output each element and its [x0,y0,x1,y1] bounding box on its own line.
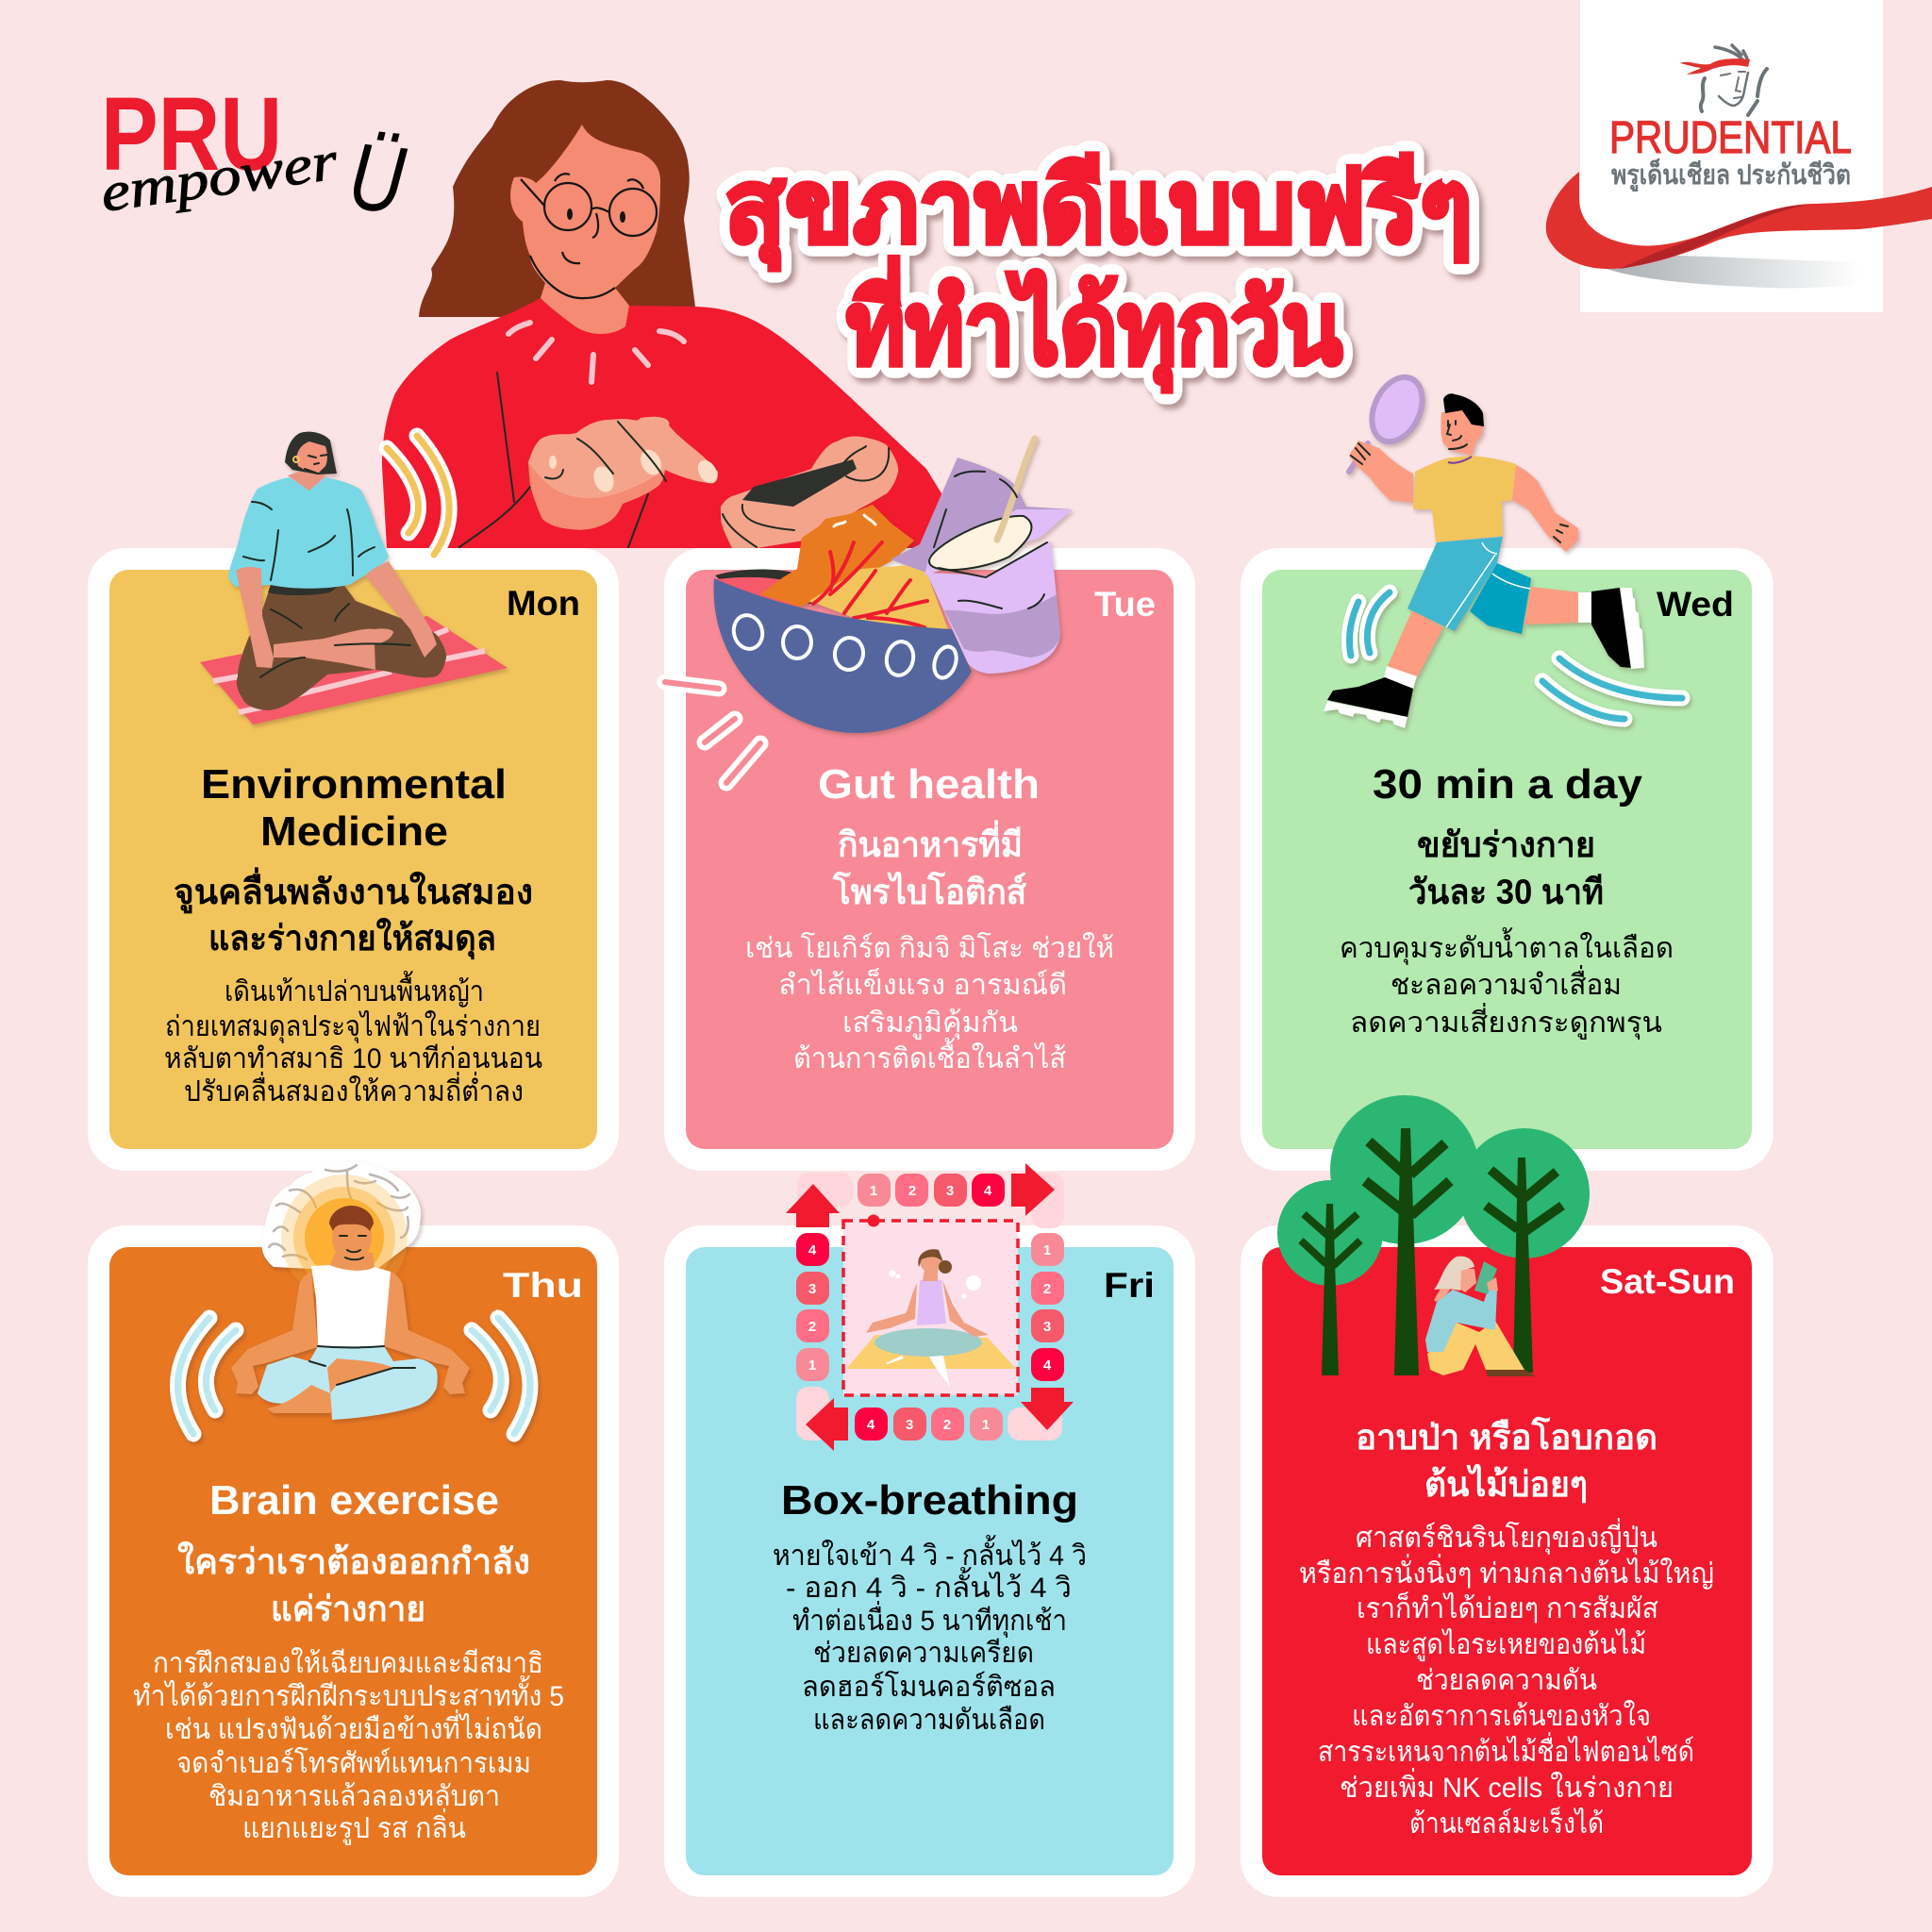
glasses [521,174,657,298]
body text: เสริมภูมิคุ้มกัน [842,1008,1018,1041]
number tiles: 2 [808,1319,816,1335]
sweater [382,298,943,548]
body text: ช่วยลดความเครียด [813,1638,1034,1669]
body text: ช่วยลดความดัน [1416,1665,1597,1696]
collar marks [508,323,684,382]
diagram: box breathing [786,1163,1074,1451]
body text: ถ่ายเทสมดุลประจุไฟฟ้าในร่างกาย [165,1009,541,1044]
subheading: อาบป่า หรือโอบกอด [1356,1416,1657,1457]
title [724,149,1473,392]
body text: ลดฮอร์โมนคอร์ติซอล [802,1670,1056,1703]
body text: ลำไส้แข็งแรง อารมณ์ดี [778,967,1067,1001]
panel: Thursday Brain exercise [88,1161,619,1897]
subheading: และร่างกายให้สมดุล [208,917,496,960]
body text: หลับตาทำสมาธิ 10 นาทีก่อนนอน [164,1043,542,1074]
number tiles: 4 [1043,1357,1052,1374]
title red fill [724,149,1473,392]
number tiles: 1 [870,1183,877,1199]
card frame [1241,1225,1774,1897]
white logo panel [1580,0,1883,312]
number tiles: 3 [808,1281,816,1297]
finger nails [549,446,721,495]
card frame [88,1225,619,1897]
panel: Monday Environmental Medicine [88,432,619,1171]
subheading: ใครว่าเราต้องออกกำลัง [177,1541,530,1581]
day label: Thu [503,1266,583,1305]
body text: หรือการนั่งนิ่งๆ ท่ามกลางต้นไม้ใหญ่ [1299,1554,1714,1590]
number tiles: 2 [943,1417,951,1433]
day label: Sat-Sun [1600,1262,1735,1301]
motion pills [665,682,760,783]
icon: running man with racket [1324,369,1682,728]
icon: brain halo and meditating man [178,1161,530,1434]
heading: Gut health [818,761,1040,808]
thai wordmark: พรูเด็นเชียล ประกันชีวิต [1611,158,1851,192]
face and neck [510,125,660,334]
heading: Box-breathing [781,1477,1078,1524]
subheading [1356,1416,1657,1504]
illustration: woman with glasses eating [382,80,943,548]
number tiles: 1 [808,1357,816,1374]
corner tiles [796,1173,1064,1441]
panel: Friday Box-breathing [664,1163,1195,1897]
body text [164,971,542,1108]
card fill [686,1247,1174,1875]
arcs: yellow sound marks [387,436,449,555]
ribbon fold [1619,205,1810,269]
body text [1340,927,1674,1041]
arrows [786,1163,1074,1451]
number tiles: 3 [1043,1319,1051,1335]
body text: เราก็ทำได้บ่อยๆ การสัมผัส [1357,1591,1658,1624]
title line 2: ที่ทำได้ทุกวัน [846,257,1342,392]
ribbon grey shadow [1607,256,1859,288]
day label: Fri [1104,1266,1155,1305]
red ribbon [1546,172,1932,269]
body text: และลดความดันเลือด [813,1705,1045,1736]
body text: เดินเท้าเปล่าบนพื้นหญ้า [225,971,484,1008]
subheading [1408,825,1604,911]
card frame [664,1225,1195,1897]
number tiles [796,1174,1064,1441]
number tiles: 2 [908,1183,916,1199]
title red fill: ที่ทำได้ทุกวัน [846,257,1342,392]
body text: สารระเหนจากต้นไม้ชื่อไฟตอนไซด์ [1318,1732,1694,1768]
body text: ทำต่อเนื่อง 5 นาทีทุกเช้า [792,1601,1067,1639]
logo: PRU empower U: Ü [344,123,410,234]
body text: แยกแยะรูป รส กลิ่น [242,1808,466,1845]
card fill [109,570,597,1149]
subheading: ขยับร่างกาย [1417,825,1595,864]
number tiles: 4 [984,1183,992,1199]
body text: ช่วยเพิ่ม NK cells ในร่างกาย [1340,1768,1674,1804]
body text: ควบคุมระดับน้ำตาลในเลือด [1340,927,1674,966]
right hand [721,437,898,548]
logo: PRU empower U: empower [97,129,341,224]
heading: Brain exercise [209,1477,499,1524]
body text: - ออก 4 วิ - กลั้นไว้ 4 วิ [786,1567,1072,1604]
body text: เช่น โยเกิร์ต กิมจิ มิโสะ ช่วยให้ [745,931,1114,964]
subheading: วันละ 30 นาที [1408,873,1604,911]
hair [419,80,695,321]
number tiles: 4 [808,1242,817,1258]
athena head [1701,45,1767,115]
number tiles: 2 [1043,1281,1051,1297]
body text: ลดความเสี่ยงกระดูกพรุน [1350,1003,1662,1041]
body text: เช่น แปรงฟันด้วยมือข้างที่ไม่ถนัด [165,1709,542,1745]
heading: Medicine [260,808,448,855]
card fill [1262,1247,1752,1875]
day label: Mon [507,584,580,623]
body text: และสูดไอระเหยของต้นไม้ [1366,1627,1646,1661]
subheading: ต้นไม้บ่อยๆ [1424,1463,1588,1504]
body text: การฝึกสมองให้เฉียบคมและมีสมาธิ [153,1647,543,1679]
icon: woman reading [1425,1257,1536,1376]
eyes [567,208,625,223]
body text: หายใจเข้า 4 วิ - กลั้นไว้ 4 วิ [773,1535,1087,1572]
card frame [88,548,619,1171]
body text [773,1535,1087,1736]
panel: Tuesday Gut health [664,439,1195,1171]
number tiles: 1 [982,1417,990,1433]
body text: ทำได้ด้วยการฝึกฝีกระบบประสาททั้ง 5 [133,1675,564,1712]
panel: Weekend forest bathing [1241,1095,1774,1897]
day label: Wed [1657,585,1734,624]
logo: PRU empower U [97,76,410,234]
body text: ชะลอความจำเสื่อม [1391,965,1622,1001]
body text [1299,1518,1714,1840]
number tiles: 1 [1043,1242,1051,1258]
number tiles: 3 [946,1183,954,1199]
body text [745,931,1114,1074]
left hand [528,417,718,530]
dashed square [843,1221,1018,1395]
day label: Tue [1094,585,1156,624]
body text [133,1647,564,1845]
body text: ปรับคลื่นสมองให้ความถี่ต่ำลง [184,1072,524,1108]
heading: 30 min a day [1373,761,1643,808]
chopsticks dark object [742,459,857,507]
icon: trees [1277,1095,1590,1375]
logo: PRU empower U: PRU [101,76,282,192]
card fill [1262,570,1752,1149]
subheading [174,867,533,960]
body text: ต้านการติดเชื้อในลำไส้ [793,1038,1066,1074]
body text: และอัตราการเต้นของหัวใจ [1352,1700,1651,1732]
subheading [832,820,1026,911]
card fill [109,1247,597,1875]
icon: breathing woman [846,1249,1016,1387]
body text: ศาสตร์ชินรินโยกุของญี่ปุ่น [1356,1518,1657,1556]
number tiles: 4 [867,1417,875,1433]
body text: ต้านเซลล์มะเร็งได้ [1409,1806,1604,1840]
card frame [664,548,1195,1171]
heading [201,761,507,855]
subheading: แค่ร่างกาย [271,1590,425,1628]
body text: ชิมอาหารแล้วลองหลับตา [208,1781,500,1812]
card frame [1241,548,1774,1171]
subheading: โพรไบโอติกส์ [832,871,1026,911]
start dot [868,1215,879,1226]
sleeve lines [459,373,648,547]
number tiles: 3 [906,1417,913,1433]
wordmark: PRUDENTIAL [1609,113,1852,163]
icon: meditating woman on mat [200,432,508,724]
icon: kimchi bowl and yogurt [714,439,1073,733]
card fill [686,570,1174,1149]
title line 1: สุขภาพดีแบบฟรีๆ [724,149,1473,271]
subheading: จูนคลื่นพลังงานในสมอง [174,867,533,914]
panel: Wednesday 30 min a day [1241,369,1774,1171]
body text: จดจำเบอร์โทรศัพท์แทนการเมม [176,1746,531,1779]
title red fill: สุขภาพดีแบบฟรีๆ [724,149,1473,271]
subheading [177,1541,530,1628]
heading: Environmental [201,761,507,808]
subheading: กินอาหารที่มี [838,820,1023,864]
logo: Prudential [1546,0,1932,312]
